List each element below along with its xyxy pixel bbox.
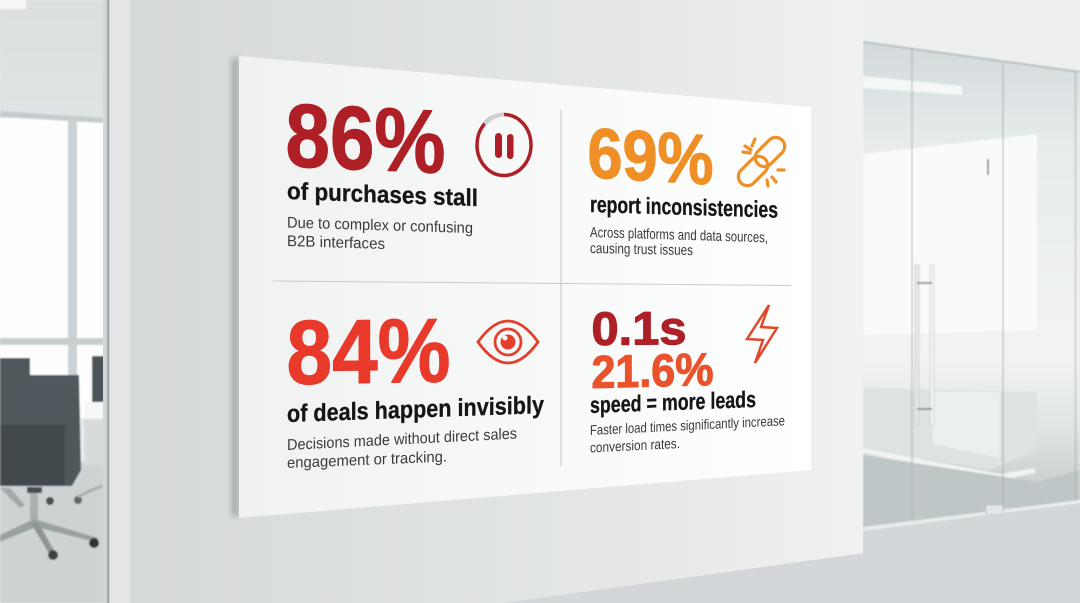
icon: eye — [478, 321, 538, 363]
icon: lightning bolt — [747, 305, 777, 363]
text: due to complex: Due to complex or confusing — [287, 215, 473, 237]
board shadow — [231, 56, 239, 518]
door frame — [103, 0, 130, 603]
heading: of deals happen invisibly: of deals happen invisibly — [287, 392, 544, 428]
heading: report inconsistencies: report inconsistencies — [590, 191, 778, 223]
text: faster load times: Faster load times significantly increase — [590, 412, 785, 438]
text: across platforms: Across platforms and data sources, — [590, 225, 768, 246]
door hinges — [986, 159, 1003, 515]
text: decisions made: Decisions made without direct sales — [287, 425, 517, 454]
stat: 84%: 84% — [286, 301, 450, 404]
stat: 69%: 69% — [588, 114, 714, 201]
text: B2B interfaces: B2B interfaces — [287, 233, 385, 253]
text: conversion rates: conversion rates. — [590, 435, 680, 455]
panel: purchases stall — [286, 85, 531, 253]
stat: 86%: 86% — [286, 85, 446, 193]
panel: inconsistencies — [588, 114, 788, 259]
back chairs — [0, 358, 30, 376]
text: causing trust issues: causing trust issues — [590, 241, 693, 259]
icon: pause ring — [477, 114, 531, 176]
wall — [110, 0, 863, 603]
icon: broken chain link — [735, 134, 788, 189]
stat: 21.6%: 21.6% — [592, 343, 714, 398]
panel: deals invisibly — [286, 301, 544, 472]
foreground office chair — [0, 375, 103, 560]
meeting table — [85, 402, 104, 419]
panel: statistics board — [239, 56, 811, 518]
door handle — [915, 265, 934, 425]
floor — [0, 503, 1080, 603]
stat: 0.1s: 0.1s — [592, 301, 687, 355]
glass partition on the right — [863, 41, 1080, 531]
left meeting room through doorway — [0, 0, 104, 603]
heading: speed = more leads: speed = more leads — [590, 386, 756, 418]
text: engagement: engagement or tracking. — [287, 449, 447, 472]
heading: of purchases stall: of purchases stall — [287, 178, 478, 212]
panel: speed leads — [590, 301, 785, 455]
